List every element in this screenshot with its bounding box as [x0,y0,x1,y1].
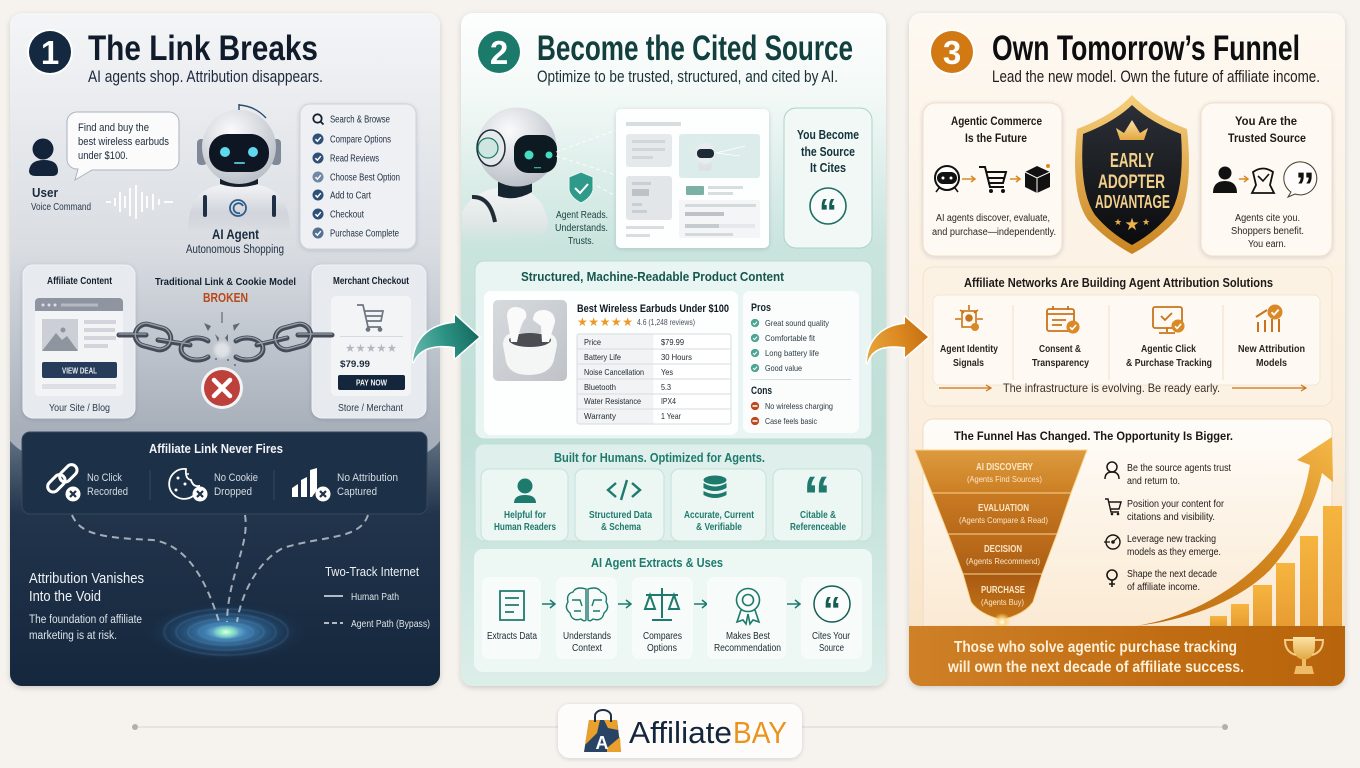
icon: voice waveform [106,185,173,219]
card: structured content [475,261,872,439]
card: you become the source [784,108,872,248]
speech bubble: Find and buy the [78,122,149,134]
number badge 2: 2 [490,34,508,71]
feature: new attribution models [1238,304,1305,369]
text: no click recorded: Recorded [87,486,128,498]
funnel diagram: (Agents Buy) [981,597,1024,607]
number badge 3 [929,29,975,75]
feature: click and purchase tracking: Agentic Click [1141,344,1196,355]
step: cites your source: Cites Your [812,631,851,642]
step: makes best recommendation: Recommendation [714,643,781,654]
step: compares options: Compares [643,631,682,642]
icon: AI agent robot [188,104,290,230]
step: cites your source [801,577,862,659]
bullet: shape the decade: Shape the next decade [1127,569,1217,580]
funnel diagram: (Agents Compare & Read) [959,515,1048,525]
legend: two-track internet [324,565,430,630]
spec table: Bluetooth [584,382,616,392]
feature: click and purchase tracking [1126,307,1212,369]
tile: citable referenceable: Citable & [800,510,836,521]
feature: consent and transparency: Transparency [1032,358,1089,369]
arrow [618,600,631,608]
number badge 1 [27,29,73,75]
card: pros and cons [743,291,859,433]
tile: accurate current verifiable [671,469,766,541]
card: agent checklist [300,104,416,249]
feature: new attribution models: New Attribution [1238,344,1305,355]
arrow: growth swoosh [1135,437,1333,626]
funnel diagram: PURCHASE [981,585,1025,596]
text: attribution vanishes [29,571,144,605]
card: merchant checkout: ★★★★★ [345,343,397,355]
label: AI Agent: AI Agent [212,227,259,242]
card: affiliate networks [923,267,1332,406]
speech bubble: under $100. [78,150,128,162]
tile: helpful for human readers [481,469,568,541]
feature: agent identity signals: Signals [953,358,984,369]
icon: cart [357,305,383,331]
badge: early adopter advantage: EARLY [1110,150,1154,172]
feature: consent and transparency: Consent & [1039,344,1081,355]
step: understands context [556,577,617,659]
step: understands context: Context [572,643,602,654]
icon: stars [1114,215,1150,234]
funnel diagram: (Agents Find Sources) [967,474,1042,484]
feature: new attribution models: Models [1256,358,1287,369]
arrow: teal panel 1 to panel 2 [413,315,479,362]
arrow [694,600,707,608]
image: earbuds [493,300,567,381]
tile: structured data [575,469,664,541]
tile: citable referenceable: Referenceable [790,522,846,533]
wordmark: BAY: BAY [733,715,787,750]
card: agent checklist: Search & Browse [330,114,390,126]
card: pros and cons: No wireless charging [765,401,833,411]
card: agent checklist: Read Reviews [330,154,379,164]
text: no attribution captured: No Attribution [337,472,398,484]
bullet: position content: citations and visibility. [1127,512,1215,523]
text: no cookie dropped: Dropped [214,486,252,498]
card: you become the source: You Become [797,128,859,142]
card: you become the source: the Source [801,145,855,159]
card: merchant checkout: PAY NOW [356,378,387,388]
bullet: be the source: and return to. [1127,476,1180,487]
bottom callout band: will own the next decade of affiliate success. [947,659,1244,676]
card: you become the source: It Cites [810,161,846,175]
label: agent reads: Agent Reads. [556,209,608,221]
bullet: be the source [1105,462,1231,487]
card: merchant checkout: Store / Merchant [338,403,403,414]
text: no click recorded [87,472,128,498]
arrow [787,600,800,608]
heading: The Link Breaks: The Link Breaks [88,29,318,68]
tile: structured data: & Schema [601,522,641,533]
card: trusted source [1201,103,1332,256]
arrow: orange panel 2 to panel 3 [867,317,928,363]
badge: early adopter advantage [1075,95,1189,254]
text: no attribution captured [337,472,398,498]
icon: search [313,114,324,124]
label: BROKEN: BROKEN [203,290,248,305]
spec table: 1 Year [661,411,681,421]
step: makes best recommendation [707,577,786,659]
bullet: leverage tracking: models as they emerge. [1127,547,1221,558]
funnel diagram: EVALUATION [978,503,1029,514]
step: cites your source: “ [823,589,841,630]
bullet: leverage tracking: Leverage new tracking [1127,534,1216,545]
icon: cookie [169,469,208,502]
spec table: Price [584,337,601,347]
card: trusted source: Shoppers benefit. [1231,226,1304,237]
card: AI agent extracts and uses [474,549,872,672]
card: merchant checkout: Merchant Checkout [333,276,410,287]
feature: click and purchase tracking: & Purchase Tracking [1126,358,1212,369]
card: AI agent extracts and uses: AI Agent Extracts & Uses [591,555,723,570]
card: agentic commerce: and purchase—independently. [932,227,1056,238]
subtitle: Optimize to be trusted, structured, and cited by AI. [537,67,838,86]
icon: trust shield [569,172,593,203]
caption: infrastructure: The infrastructure is evolving. Be ready early. [1003,381,1220,395]
number badge 2 [476,29,522,75]
heading: Become the Cited Source: Become the Cited Source [537,29,853,68]
spec table [577,334,731,424]
tile: helpful for human readers: Human Readers [494,522,556,533]
bullet: shape the decade [1107,569,1217,593]
step: extracts data: Extracts Data [487,631,537,642]
text: attribution vanishes: Attribution Vanishes [29,571,144,587]
funnel diagram: DECISION [984,544,1022,555]
spec table: Battery Life [584,352,621,362]
card: agent checklist: Choose Best Option [330,172,400,184]
heading: traditional model: Traditional Link & Cookie Model [155,276,296,288]
feature: agent identity signals: Agent Identity [940,344,998,355]
card: merchant checkout [312,265,426,418]
label: autonomous shopping: Autonomous Shopping [186,244,284,256]
legend: two-track internet: Two-Track Internet [325,565,419,579]
label: user: User [32,185,58,200]
label: voice command: Voice Command [31,201,91,213]
tile: helpful for human readers: Helpful for [504,510,546,521]
dashed agent paths [72,515,368,625]
text: foundation at risk [29,614,142,642]
card: pros and cons: Great sound quality [765,318,830,328]
card: merchant checkout: $79.99 [340,359,370,370]
tile: citable referenceable [773,464,862,541]
arrow left [939,385,991,391]
card: trusted source: You Are the [1235,114,1297,128]
icon: shopping bag [584,710,621,753]
spec table: Noise Cancellation [584,367,644,377]
icon: reading robot [462,108,557,243]
text: no attribution captured: Captured [337,486,377,498]
card: funnel has changed: The Funnel Has Changed. The Opportunity Is Bigger. [954,429,1233,443]
card: web page being read [616,109,769,248]
speech bubble [67,112,179,180]
icon: trophy [1285,637,1323,674]
card: built for humans [475,444,872,541]
card: trusted source: Agents cite you. [1235,213,1300,224]
feature: consent and transparency [1032,306,1089,369]
card: structured content: 4.6 (1,248 reviews) [637,318,695,327]
text: no cookie dropped [214,472,258,498]
card: affiliate content: Your Site / Blog [49,403,110,414]
card: agentic commerce: Agentic Commerce [951,114,1042,128]
browser mockup: VIEW DEAL [62,366,97,376]
bullet: position content [1105,499,1225,523]
footer logo: AffiliateBAY [558,704,802,758]
step: makes best recommendation: Makes Best [726,631,770,642]
bullet: position content: Position your content for [1127,499,1225,510]
icon: quote circle: “ [819,191,837,232]
wordmark: Affiliate: Affiliate [629,715,732,750]
card: agent checklist: Purchase Complete [330,228,399,240]
funnel diagram [915,450,1087,631]
number badge 1: 1 [41,34,59,71]
dark banner: affiliate link never fires [22,432,427,514]
star rating: ★★★★★ [577,315,633,329]
card: pros and cons: Comfortable fit [765,333,816,343]
card: structured content: Best Wireless Earbuds Under $100 [577,303,729,315]
step: cites your source: Source [819,643,844,654]
card: pros and cons: Pros [751,302,771,314]
card: trusted source: Trusted Source [1228,131,1306,145]
bars growth chart [1210,506,1342,626]
icon: broken link [45,462,80,502]
text: attribution vanishes: Into the Void [29,589,101,605]
text: no click recorded: No Click [87,472,122,484]
label: agent reads [555,209,608,247]
feature: agent identity signals [940,305,998,369]
icon: user [29,138,58,176]
footer timeline [132,724,1228,730]
bottom callout band [909,626,1345,686]
tile: accurate current verifiable: & Verifiable [696,522,742,533]
tile: accurate current verifiable: Accurate, Current [684,510,755,521]
tile: citable referenceable: “ [803,464,831,527]
card: structured content: Structured, Machine-Readable Product Content [521,269,785,284]
badge: early adopter advantage: ADOPTER [1098,172,1165,193]
legend: two-track internet: Human Path [351,592,399,603]
funnel diagram: (Agents Recommend) [966,556,1040,566]
label: agent reads: Understands. [555,222,608,234]
spec table: 5.3 [661,382,671,392]
number badge 3: 3 [943,34,961,71]
spec table: Water Resistance [584,396,641,406]
panel 1: The Link Breaks [10,13,440,686]
step: understands context: Understands [563,631,611,642]
bottom callout band: Those who solve agentic purchase tracking [954,639,1237,656]
icon: shopping bag: A [596,733,608,753]
bullet: be the source: Be the source agents trust [1127,463,1231,474]
panel 3: Own Tomorrow's Funnel [909,13,1345,686]
subtitle: AI agents shop. Attribution disappears. [88,67,323,86]
icon: stars: ★ [1114,217,1122,227]
card: pros and cons: Long battery life [765,348,819,358]
step: compares options [632,577,693,659]
card: agent checklist: Checkout [330,210,364,220]
arrow right [1232,385,1306,391]
spec table: Warranty [584,411,617,421]
scan beams [556,130,616,196]
icon: crown [1116,120,1148,140]
spec table: 30 Hours [661,352,692,362]
bullet: leverage tracking [1104,534,1221,558]
icon: stars: ★ [1142,217,1150,227]
icon row: robot to cart to box [935,164,1050,193]
card: affiliate content [23,265,135,418]
card: built for humans: Built for Humans. Optimized for Agents. [554,450,765,465]
spec table: Yes [661,367,673,377]
tile: structured data: Structured Data [589,510,652,521]
icon row: person to reader to quote: ” [1296,166,1314,208]
legend: two-track internet: Agent Path (Bypass) [351,619,430,630]
icon: red X [201,367,243,409]
icon: stars: ★ [1124,215,1140,234]
step: extracts data [482,577,541,659]
spec table: $79.99 [661,337,684,347]
card: affiliate content: Affiliate Content [47,276,113,287]
text: foundation at risk: The foundation of affiliate [29,614,142,626]
broken chain [119,312,332,366]
dark banner: affiliate link never fires: Affiliate Link Never Fires [149,441,283,456]
badge: early adopter advantage: ADVANTAGE [1095,192,1170,212]
card: affiliate networks: Affiliate Networks Are Building Agent Attribution Solutions [964,276,1273,290]
speech bubble: best wireless earbuds [78,136,169,148]
card: pros and cons: Good value [765,363,802,373]
card: pros and cons: Cons [751,385,772,397]
label: agent reads: Trusts. [568,235,594,247]
text: foundation at risk: marketing is at risk. [29,630,117,642]
step: compares options: Options [647,643,677,654]
card: agent checklist: Compare Options [330,134,391,146]
icon row: person to reader to quote [1213,162,1317,208]
card: agentic commerce [923,103,1062,256]
card: trusted source: You earn. [1248,239,1286,250]
card: agentic commerce: AI agents discover, evaluate, [936,213,1050,224]
icon: broken bars [292,468,330,502]
card: pros and cons: Case feels basic [765,416,818,426]
arrow [542,600,555,608]
vortex void [142,601,310,663]
text: no cookie dropped: No Cookie [214,472,258,484]
mini robot [695,143,715,172]
spec table: IPX4 [661,396,676,406]
funnel diagram: AI DISCOVERY [976,462,1033,473]
browser mockup [35,298,123,396]
card: agent checklist: Add to Cart [330,190,371,202]
bullet: shape the decade: of affiliate income. [1127,582,1200,593]
card: agentic commerce: Is the Future [965,131,1027,145]
card: funnel has changed [909,419,1345,686]
